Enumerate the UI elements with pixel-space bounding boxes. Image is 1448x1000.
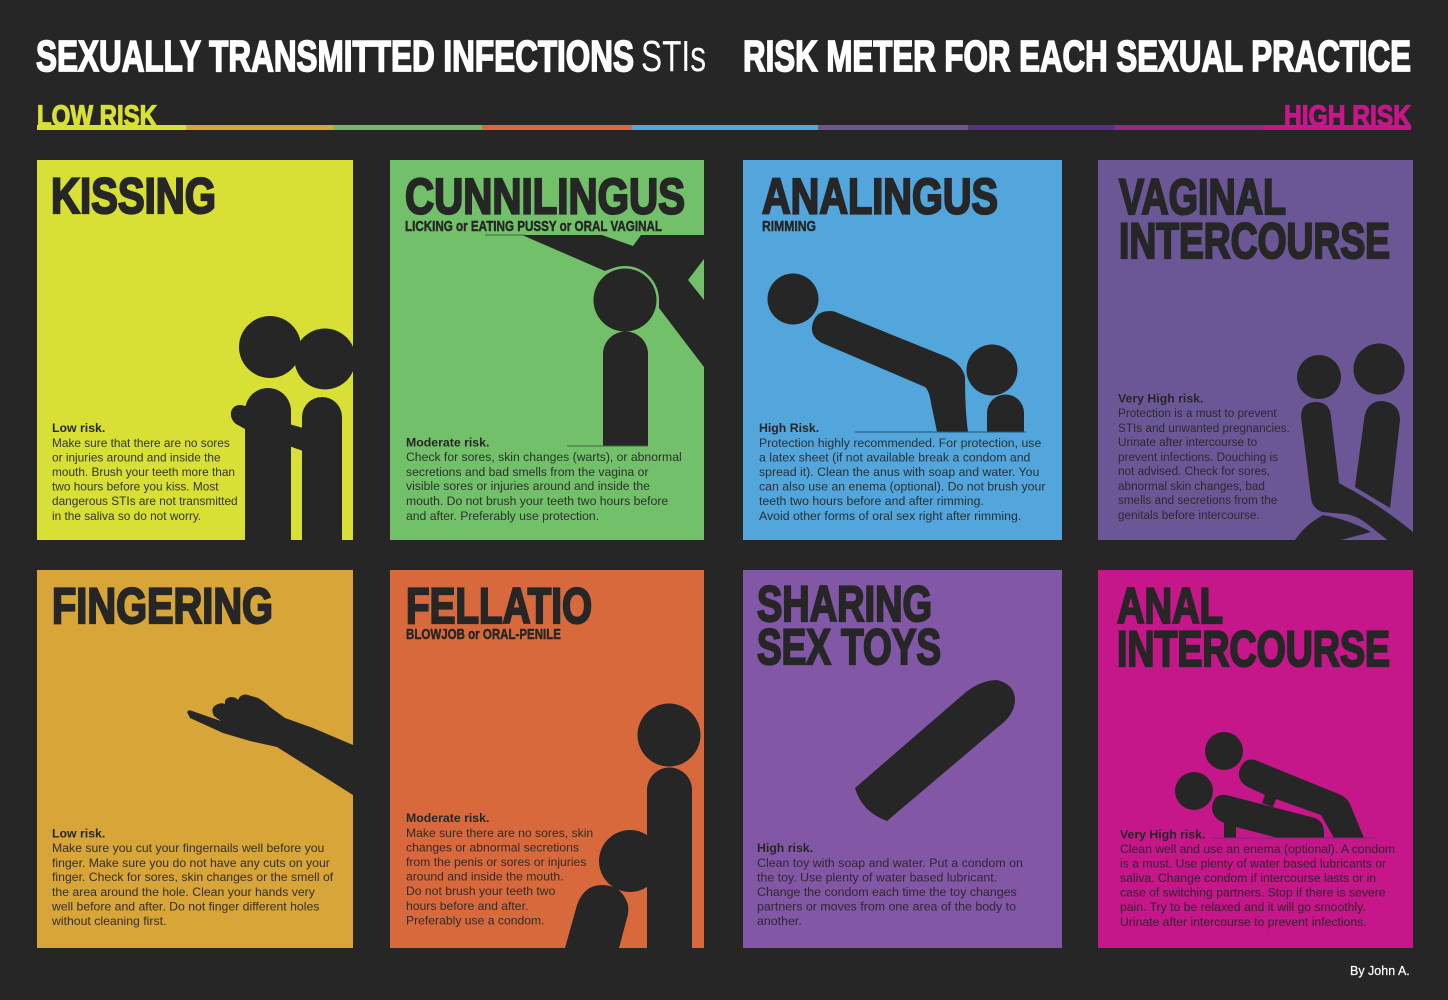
text: cunnilingus advice: mouth. Do not brush your teeth two hours before — [406, 494, 668, 508]
text: vaginal intercourse advice: prevent infections. Douching is — [1118, 451, 1278, 464]
text: fingering advice: finger. Make sure you do not have any cuts on your — [52, 856, 330, 870]
text: anal intercourse advice: Clean well and use an enema (optional). A condom — [1120, 842, 1395, 856]
text: anal intercourse advice: Urinate after intercourse to prevent infections. — [1120, 915, 1367, 929]
text: kissing advice: two hours before you kiss. Most — [52, 480, 219, 494]
heading: anal intercourse: ANAL — [1117, 578, 1223, 634]
text: vaginal intercourse advice: genitals before intercourse. — [1118, 509, 1260, 522]
text: sharing sex toys advice: the toy. Use plenty of water based lubricant. — [757, 870, 997, 884]
icon: oral vaginal silhouette — [485, 234, 704, 446]
panel: analingus — [743, 160, 1062, 540]
text: vaginal intercourse advice: Very High risk. — [1118, 392, 1203, 406]
text: fellatio advice: Moderate risk. — [406, 811, 489, 825]
text: fingering advice — [51, 826, 334, 928]
icon: fellatio silhouette — [565, 704, 700, 948]
heading: vaginal intercourse: VAGINAL — [1119, 169, 1286, 225]
risk meter bar — [37, 125, 1411, 130]
icon: two people kissing — [231, 316, 356, 540]
text: analingus advice — [759, 421, 1045, 523]
text: kissing advice: Make sure that there are no sores — [52, 436, 230, 450]
text: fellatio advice: changes or abnormal secretions — [406, 840, 579, 854]
text: cunnilingus advice: and after. Preferably use protection. — [406, 509, 599, 523]
label: high risk: HIGH RISK — [1284, 100, 1411, 133]
text: fellatio advice: Make sure there are no sores, skin — [406, 826, 593, 840]
text: sharing sex toys advice: High risk. — [757, 841, 813, 855]
label: low risk: LOW RISK — [37, 100, 157, 133]
text: fingering advice: well before and after. Do not finger different holes — [51, 900, 319, 914]
text: vaginal intercourse advice: abnormal skin changes, bad — [1118, 480, 1265, 493]
text: kissing advice: in the saliva so do not worry. — [52, 509, 201, 523]
heading: fingering: FINGERING — [52, 578, 273, 634]
text: anal intercourse advice: saliva. Change condom if intercourse lasts or in — [1120, 871, 1376, 885]
text: anal intercourse advice: Very High risk. — [1120, 828, 1205, 842]
text: kissing advice: mouth. Brush your teeth more than — [52, 465, 235, 479]
heading: cunnilingus: CUNNILINGUS — [405, 168, 685, 224]
text: sharing sex toys advice: another. — [757, 914, 802, 928]
credit: By John A. — [1350, 964, 1410, 978]
text: analingus advice: High Risk. — [759, 421, 819, 435]
text: cunnilingus advice: Moderate risk. — [406, 436, 489, 450]
heading: analingus: ANALINGUS — [762, 168, 998, 224]
text: fellatio advice: Preferably use a condom. — [406, 914, 545, 928]
icon: hand silhouette — [187, 695, 353, 795]
text: fellatio advice: from the penis or sores or injuries — [406, 855, 586, 869]
text: analingus advice: Protection highly recommended. For protection, use — [759, 436, 1041, 450]
text: fellatio advice: hours before and after. — [406, 899, 528, 913]
text: kissing advice: or injuries around and inside the — [52, 450, 221, 464]
text: cunnilingus advice: Check for sores, skin changes (warts), or abnormal — [406, 450, 682, 464]
text: fingering advice: Make sure you cut your fingernails well before you — [52, 841, 324, 855]
text: kissing advice: dangerous STIs are not transmitted — [52, 494, 238, 508]
panel: cunnilingus — [390, 160, 704, 540]
text: cunnilingus advice: secretions and bad smells from the vagina or — [406, 465, 649, 479]
panel: vaginal intercourse — [1098, 160, 1413, 542]
text: sharing sex toys advice: Change the condom each time the toy changes — [757, 885, 1017, 899]
text: fellatio advice: around and inside the mouth. — [406, 870, 563, 884]
icon: vaginal intercourse silhouette — [1295, 344, 1413, 542]
text: anal intercourse advice: is a must. Use plenty of water based lubricants or — [1120, 856, 1386, 870]
text: analingus advice: teeth two hours before and after rimming. — [759, 494, 984, 508]
text: anal intercourse advice: pain. Try to be relaxed and it will go smoothly. — [1120, 900, 1366, 914]
heading: kissing: KISSING — [51, 168, 216, 224]
panel: anal intercourse — [1098, 570, 1413, 948]
title: sexually transmitted infections: SEXUALLY TRANSMITTED INFECTIONS — [36, 32, 634, 81]
text: analingus advice: Avoid other forms of oral sex right after rimming. — [759, 509, 1021, 523]
text: vaginal intercourse advice: smells and secretions from the — [1118, 494, 1278, 507]
panel: sharing sex toys — [743, 570, 1062, 948]
icon: anal intercourse silhouette — [1175, 732, 1375, 838]
text: sharing sex toys advice: partners or moves from one area of the body to — [757, 900, 1016, 914]
text: vaginal intercourse advice: Protection is a must to prevent — [1118, 407, 1277, 420]
icon: sex toy — [855, 680, 1015, 821]
heading: fellatio: FELLATIO — [406, 578, 592, 634]
text: fingering advice: Low risk. — [52, 826, 105, 840]
title: sexually transmitted infections: STIs — [641, 32, 706, 81]
text: anal intercourse advice — [1120, 828, 1395, 929]
heading: vaginal intercourse — [1119, 169, 1390, 269]
panel: kissing — [37, 160, 356, 540]
text: fingering advice: finger. Check for sores, skin changes or the smell of — [52, 870, 334, 884]
text: fellatio advice: Do not brush your teeth two — [406, 884, 556, 898]
heading: sharing sex toys: SHARING — [757, 576, 932, 632]
subheading: rimming: RIMMING — [762, 219, 816, 235]
text: vaginal intercourse advice: not advised. Check for sores, — [1118, 465, 1270, 478]
text: analingus advice: a latex sheet (if not available break a condom and — [759, 450, 1031, 464]
text: sharing sex toys advice: Clean toy with soap and water. Put a condom on — [757, 856, 1023, 870]
text: fingering advice: without cleaning first. — [51, 914, 166, 928]
icon: analingus silhouette — [768, 274, 1026, 432]
text: cunnilingus advice: visible sores or injuries around and inside the — [406, 479, 650, 493]
text: kissing advice: Low risk. — [52, 421, 105, 435]
text: kissing advice — [52, 421, 238, 523]
heading: sharing sex toys — [757, 576, 941, 675]
text: fingering advice: the area around the hole. Clean your hands very — [52, 885, 316, 899]
text: sharing sex toys advice — [757, 841, 1023, 928]
panel: fellatio — [390, 570, 704, 948]
subheading: cunnilingus synonyms: LICKING or EATING PUSSY or ORAL VAGINAL — [405, 219, 662, 235]
text: anal intercourse advice: case of switching partners. Stop if there is severe — [1120, 886, 1386, 900]
panel: fingering — [37, 570, 353, 948]
text: analingus advice: spread it). Clean the anus with soap and water. You — [759, 465, 1039, 479]
text: vaginal intercourse advice: STIs and unwanted pregnancies. — [1118, 422, 1290, 435]
text: vaginal intercourse advice — [1118, 392, 1290, 522]
text: cunnilingus advice — [406, 436, 682, 523]
text: vaginal intercourse advice: Urinate after intercourse to — [1118, 436, 1258, 449]
heading: sharing sex toys: SEX TOYS — [757, 619, 941, 675]
subheading: fellatio synonyms: BLOWJOB or ORAL-PENILE — [406, 627, 561, 643]
text: fellatio advice — [406, 811, 593, 928]
heading: anal intercourse — [1117, 578, 1390, 677]
text: analingus advice: can also use an enema (optional). Do not brush your — [759, 480, 1045, 494]
